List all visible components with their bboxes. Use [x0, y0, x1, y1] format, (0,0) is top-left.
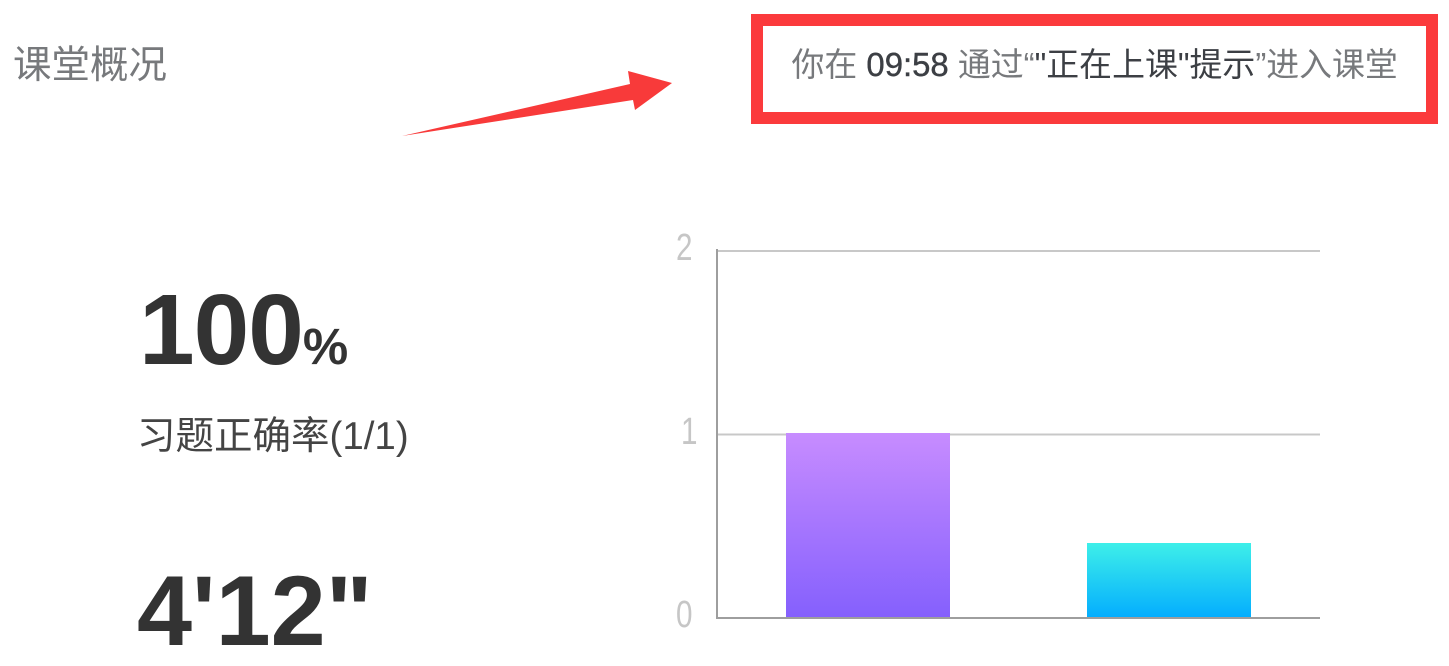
callout text: 你在 09:58 通过“"正在上课"提示”进入课堂 [792, 46, 1398, 83]
bar: cyan [1087, 543, 1251, 617]
y axis labels: 1 [681, 411, 697, 453]
bar: purple [786, 433, 950, 617]
stat: duration value: 4'12" [137, 555, 373, 666]
y axis labels [676, 227, 697, 636]
heading: class overview: 课堂概况 [13, 44, 167, 87]
callout: entry time box [751, 14, 1438, 124]
y axis labels: 2 [676, 227, 692, 269]
stat: accuracy label: 习题正确率(1/1) [137, 415, 409, 458]
stat: accuracy value: 100% [139, 274, 347, 386]
y axis labels: 0 [676, 594, 692, 636]
bar chart [676, 227, 1320, 636]
